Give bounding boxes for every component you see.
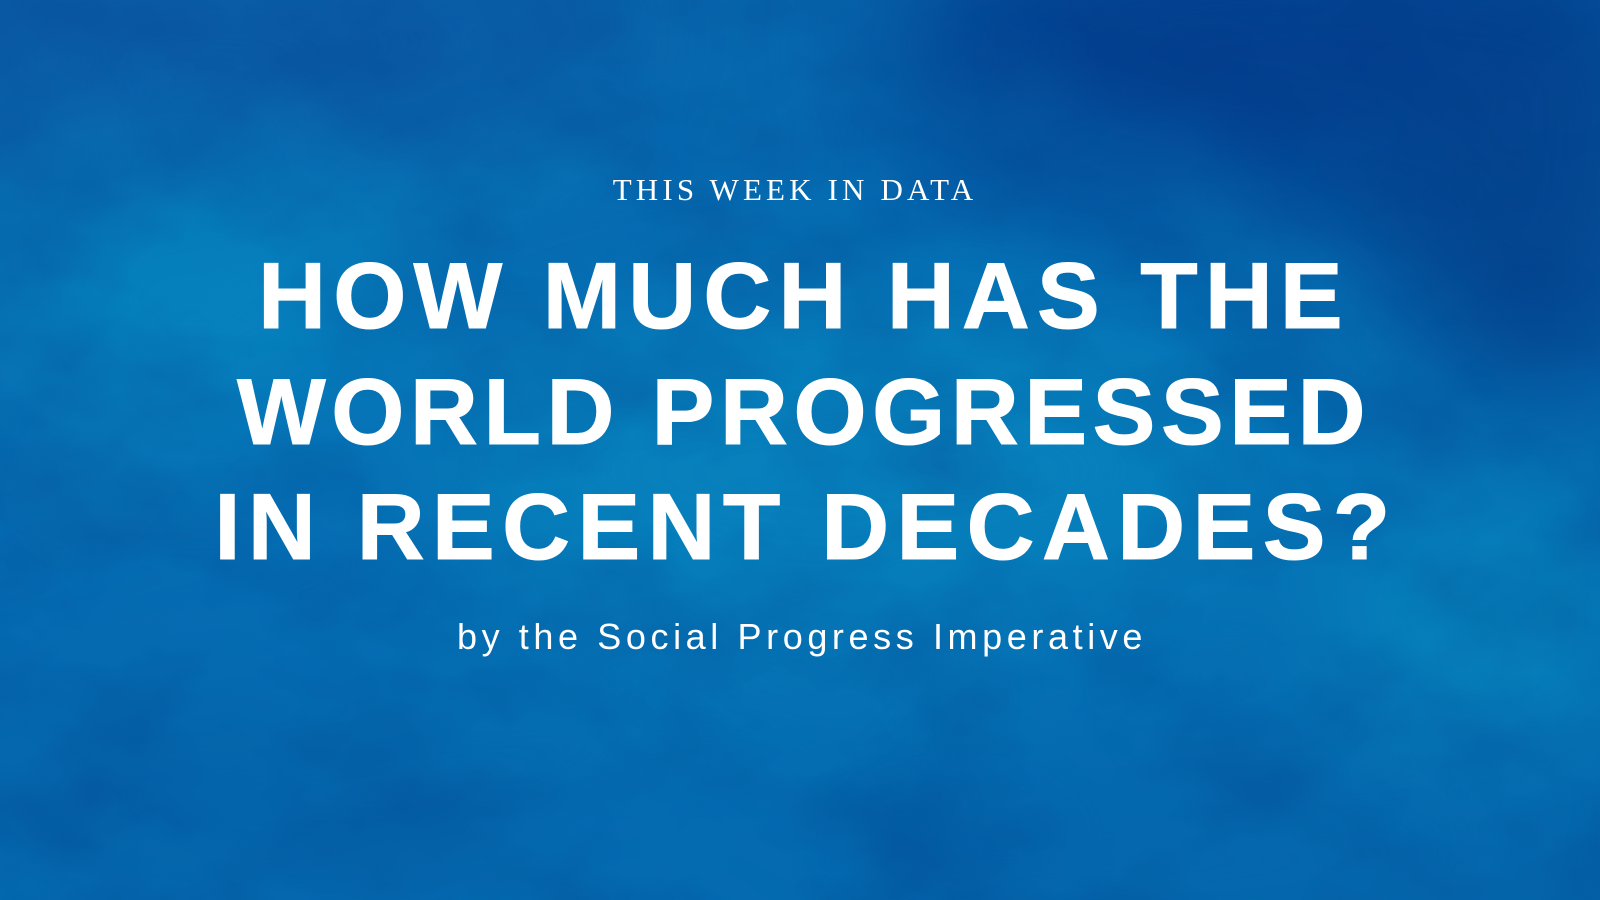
byline: by the Social Progress Imperative [457, 616, 1147, 657]
title: WORLD PROGRESSED [237, 359, 1371, 464]
title: IN RECENT DECADES? [214, 474, 1398, 579]
title: HOW MUCH HAS THE [258, 243, 1350, 348]
kicker: this week in data: THIS WEEK IN DATA [613, 172, 977, 207]
